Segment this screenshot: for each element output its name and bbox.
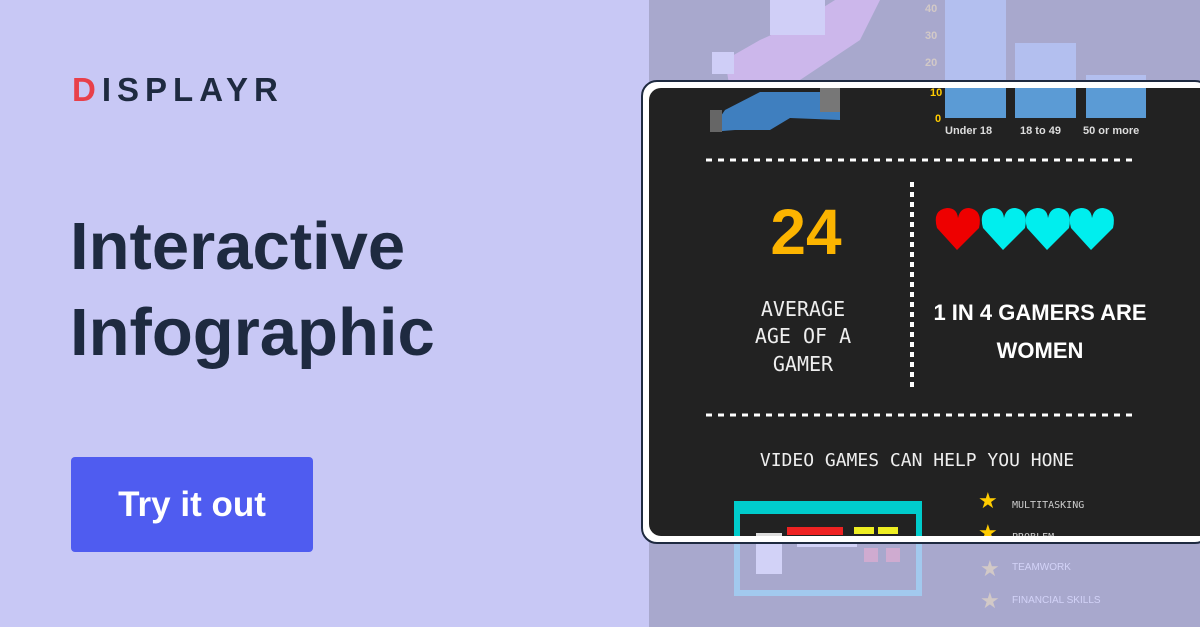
panel: infographic background strip: TEAMWORK [1012,562,1071,573]
text: average age: GAMER [773,352,834,376]
list: skills: ★ [978,488,998,513]
panel: infographic background strip [649,0,1200,627]
button: try it out: Try it out [118,485,266,524]
bar chart: 0 [935,113,941,125]
stat: 24: 24 [770,196,842,268]
icon: hearts [936,208,1114,250]
icon: pixel character legs [710,88,840,132]
panel: infographic background strip: ★ [980,556,1000,581]
overlay fade [649,0,1200,627]
text: 1 in 4 gamers are women: 1 IN 4 GAMERS ARE [933,300,1147,325]
bar chart: 50 or more [1083,125,1139,137]
logo: DISPLAYR [72,71,284,108]
button: try it out [71,457,313,552]
panel: infographic background strip: 30 [925,30,937,42]
panel: infographic background strip: ★ [980,588,1000,613]
panel: infographic background strip: FINANCIAL SKILLS [1012,595,1101,606]
icon: controller [734,501,922,554]
heading [70,209,435,370]
text: 1 in 4 gamers are women: WOMEN [997,338,1083,363]
bar chart [930,87,1146,137]
list: skills [978,488,1084,545]
panel: infographic background strip: 20 [925,57,937,69]
heading: Interactive [70,209,405,284]
text: average age: AGE OF A [755,324,851,348]
text: video games can help you hone: VIDEO GAMES CAN HELP YOU HONE [760,450,1074,471]
text: average age: AVERAGE [761,297,845,321]
bar chart: Under 18 [945,125,992,137]
panel: infographic card [641,80,1200,544]
panel: infographic background strip: 40 [925,3,937,15]
text: average age [755,297,851,376]
bar chart: 18 to 49 [1020,125,1061,137]
list: skills: MULTITASKING [1012,500,1084,511]
heading: Infographic [70,295,435,370]
text: 1 in 4 gamers are women [933,300,1147,363]
